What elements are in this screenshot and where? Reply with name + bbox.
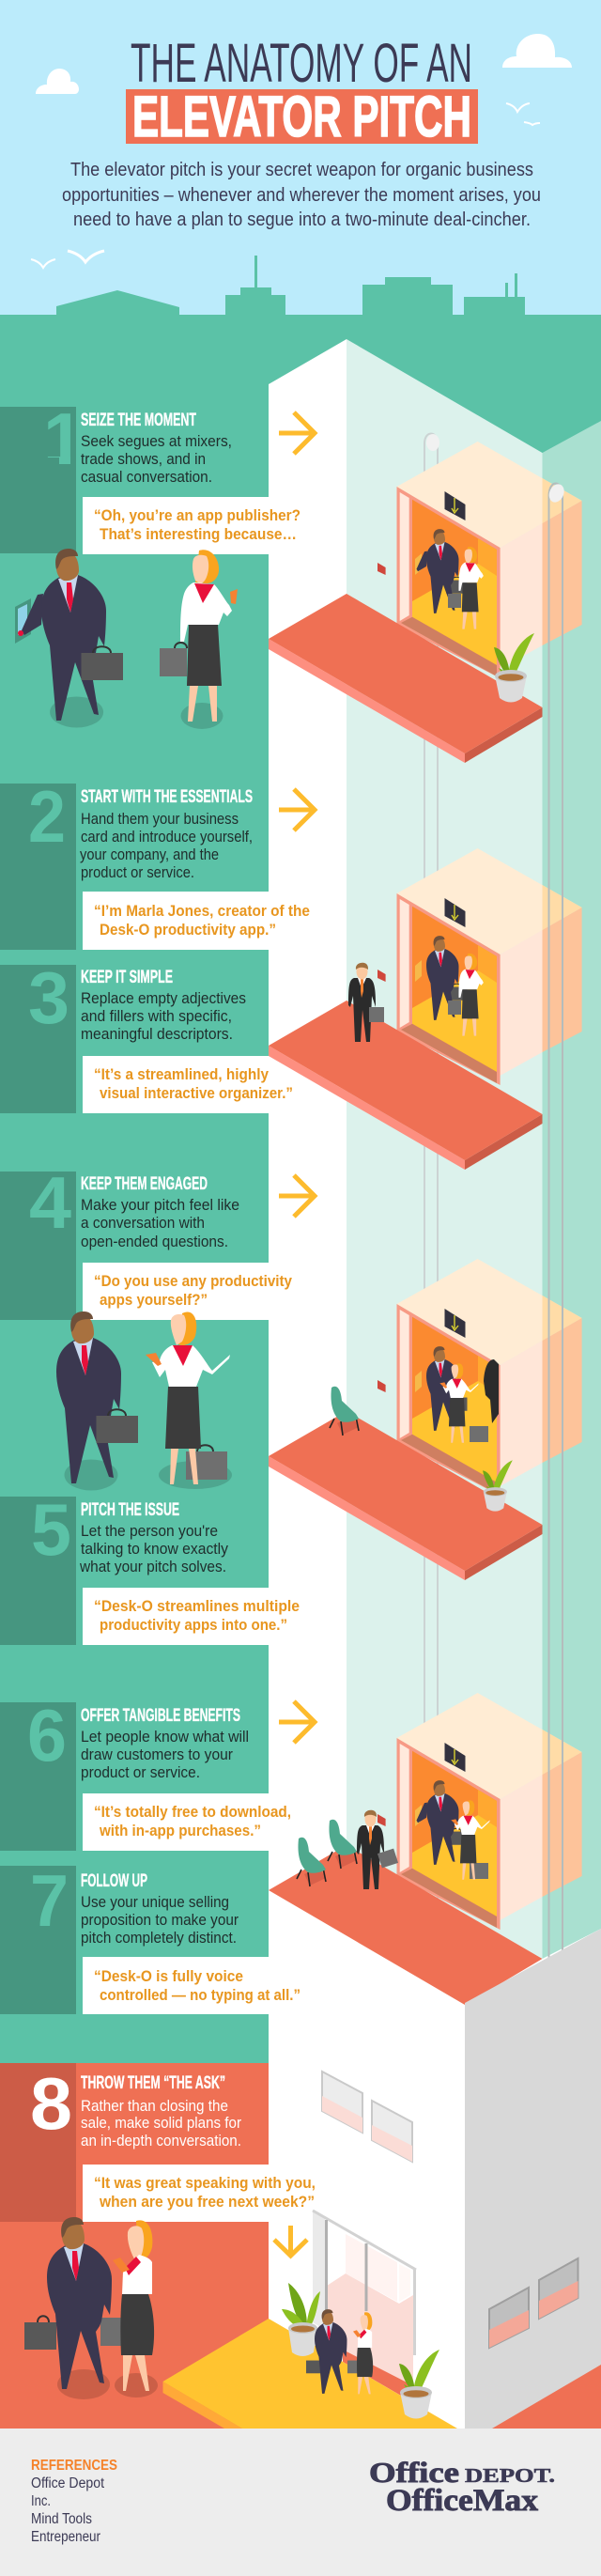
floor and elevator 3 [269,1259,582,1580]
step 6 panel: Let people know what will [81,1728,249,1746]
step 6 panel: “It’s totally free to download, [94,1803,291,1821]
references: Entrepeneur [31,2529,100,2545]
step 4 panel: open-ended questions. [81,1233,228,1250]
intro text: need to have a plan to segue into a two-minute deal-cincher. [73,209,531,230]
step 6 panel: 6 [27,1694,67,1777]
floor and elevator 4 [269,1693,582,2005]
lobby plant left [282,2283,320,2356]
step 4 panel [0,1161,292,1320]
step 4 panel: KEEP THEM ENGAGED [81,1174,208,1194]
people step 1 [15,549,238,729]
step 7 panel [0,1859,300,2014]
step 5 panel: productivity apps into one.” [100,1616,287,1634]
step 3 panel: KEEP IT SIMPLE [81,968,173,987]
step 7 panel: Use your unique selling [81,1893,229,1911]
step 5 panel [0,1488,300,1645]
arrow 3 [279,1175,315,1217]
plant 1 [494,633,534,703]
lower right orange ground [492,2365,601,2429]
step 3 panel: 3 [28,956,69,1039]
grey wall windows [489,2258,578,2348]
building [269,339,601,2429]
step 1 panel: “Oh, you’re an app publisher? [94,506,300,524]
floor and elevator 2 [269,848,582,1170]
man in elevator 1 [417,529,468,613]
step 1 panel: trade shows, and in [81,450,206,468]
cloud right [502,34,572,68]
step 8 panel: when are you free next week?” [99,2193,315,2211]
lobby plant right [399,2350,439,2418]
right elevator cables [547,482,567,1963]
upper windows [322,2072,412,2162]
birds [31,103,540,268]
step 6 panel: with in-app purchases.” [99,1822,261,1839]
step 8 panel: 8 [30,2062,72,2145]
intro text: opportunities – whenever and wherever the moment arises, you [62,185,541,206]
man waiting, floor 2 [348,963,384,1042]
plant, floor 3 [483,1460,513,1512]
arrow 1 [279,412,315,454]
step 3 panel: Replace empty adjectives [81,989,246,1007]
step 5 panel: 5 [31,1488,71,1571]
lobby woman [353,2312,373,2394]
step 2 panel: “I’m Marla Jones, creator of the [94,902,310,920]
step 8 panel: THROW THEM “THE ASK” [81,2073,225,2093]
references: Office Depot [31,2475,105,2491]
references [31,2458,117,2545]
step 8 panel [0,2062,316,2222]
grey tower [465,1929,601,2429]
step 2 panel: 2 [28,775,66,858]
step 7 panel: FOLLOW UP [81,1871,147,1891]
step 4 panel: Make your pitch feel like [81,1196,239,1214]
chair, floor 3 [330,1387,359,1435]
step 4 panel: apps yourself?” [100,1291,208,1309]
step 7 panel: pitch completely distinct. [81,1929,237,1947]
people step 4 [56,1311,232,1490]
step 8 panel: sale, make solid plans for [81,2114,241,2132]
step 3 panel: and fillers with specific, [81,1007,232,1025]
floor and elevator 1 [269,442,582,763]
step 6 panel: OFFER TANGIBLE BENEFITS [81,1706,240,1726]
step 2 panel: Desk-O productivity app.” [100,921,276,939]
intro text [62,160,541,230]
step 1 panel: SEIZE THE MOMENT [81,411,196,430]
title [126,33,478,148]
logo [369,2456,555,2518]
step 1 panel: That’s interesting because… [100,525,297,543]
step 7 panel: “Desk-O is fully voice [94,1967,243,1985]
references: Inc. [31,2493,51,2509]
step 5 panel: PITCH THE ISSUE [81,1500,179,1520]
arrow 4 [279,1701,315,1743]
step 4 panel: a conversation with [81,1214,205,1232]
references: REFERENCES [31,2458,117,2474]
step 5 panel: what your pitch solves. [79,1558,226,1575]
glass entrance [313,2211,420,2396]
arrow 2 [279,789,315,830]
step 3 panel: meaningful descriptors. [81,1025,233,1043]
banner [126,89,478,144]
left elevator cables [424,434,439,1907]
step 3 panel: visual interactive organizer.” [100,1084,293,1102]
step 5 panel: talking to know exactly [81,1540,228,1558]
footer band [0,2429,601,2576]
logo: DEPOT. [465,2464,555,2487]
references: Mind Tools [31,2511,92,2527]
yellow platform [163,2319,457,2429]
step 6 panel: product or service. [81,1763,200,1781]
step 2 panel: your company, and the [80,846,219,863]
step 2 panel: Hand them your business [81,810,239,828]
step 3 panel [0,956,293,1113]
down arrow [274,2226,307,2256]
step 1 panel: Seek segues at mixers, [81,432,232,450]
lobby man [306,2309,359,2394]
orange left column [0,2063,269,2429]
woman, floor 3 [439,1363,488,1443]
step 2 panel: card and introduce yourself, [81,828,253,846]
step 4 panel: 4 [29,1161,71,1244]
step 2 panel: START WITH THE ESSENTIALS [81,787,253,807]
logo: OfficeMax [386,2484,539,2518]
step 5 panel: “Desk-O streamlines multiple [94,1597,300,1615]
step 2 panel [0,775,310,950]
logo: Office [369,2456,459,2489]
intro text: The elevator pitch is your secret weapon for organic business [70,160,533,180]
woman, floor 4 [451,1800,490,1880]
step 2 panel: product or service. [81,863,194,881]
step 6 panel: draw customers to your [81,1746,233,1763]
step 8 panel: “It was great speaking with you, [94,2174,316,2192]
people step 8 [24,2217,158,2399]
step 3 panel: “It’s a streamlined, highly [94,1065,269,1083]
step 1 panel [0,397,300,554]
step 1 panel: casual conversation. [81,468,212,486]
sky background [0,0,601,319]
step 7 panel: proposition to make your [81,1911,239,1929]
cloud left [36,69,79,94]
step 4 panel: “Do you use any productivity [94,1272,292,1290]
step 7 panel: controlled — no typing at all.” [100,1986,300,2004]
skyline [0,256,601,489]
step 5 panel: Let the person you're [81,1522,218,1540]
woman in elevator 1 [448,547,484,629]
step 7 panel: 7 [30,1859,69,1942]
chairs, floor 4 [297,1820,357,1886]
black suit in doorway, floor 3 [484,1359,499,1423]
step 8 panel: Rather than closing the [81,2097,228,2115]
green left column [0,315,269,2063]
step 6 panel [0,1694,291,1851]
step 8 panel: an in-depth conversation. [81,2132,241,2149]
man walking, floor 4 [357,1810,398,1889]
step 1 panel: 1 [43,397,84,480]
